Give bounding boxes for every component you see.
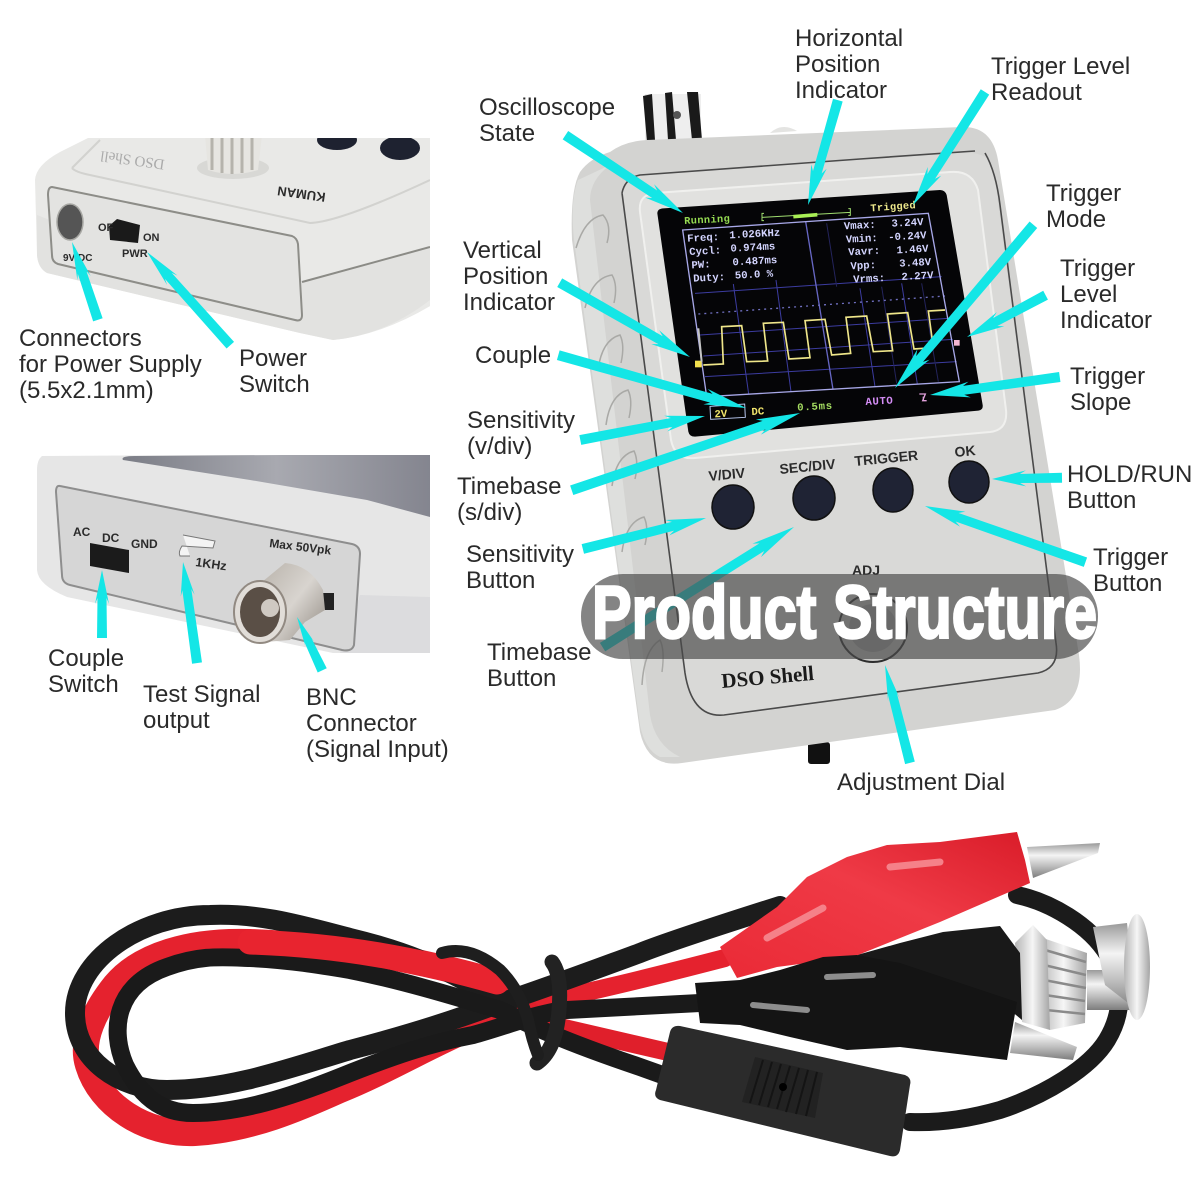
label: Couple Switch: Switch xyxy=(48,671,119,698)
adjustment knob xyxy=(197,135,269,179)
label: Trigger Level Indicator: Trigger xyxy=(1060,255,1135,282)
BNC plug xyxy=(857,914,1150,1030)
label: Sensitivity: (v/div) xyxy=(467,433,532,460)
label: Trigger Mode: Trigger xyxy=(1046,180,1121,207)
status bar: AUTO xyxy=(865,396,894,409)
measurements left: Cycl: xyxy=(689,245,721,259)
measurements left xyxy=(687,228,781,286)
arrow: couple switch xyxy=(95,570,109,638)
arrow: trigger level readout xyxy=(906,88,992,209)
state readouts xyxy=(684,200,916,228)
power jack xyxy=(57,204,83,240)
measurements right: 3.48V xyxy=(899,257,932,271)
rear BNC connector xyxy=(643,92,797,144)
label: Oscilloscope State: Oscilloscope xyxy=(479,94,615,121)
arrow: sensitivity button xyxy=(581,510,708,557)
label: Trigger Button: Button xyxy=(1093,570,1162,597)
black alligator clip xyxy=(695,955,1077,1060)
panel labels: 1KHz xyxy=(195,555,227,573)
arrow: sensitivity xyxy=(579,408,707,448)
button captions: SEC/DIV xyxy=(779,456,837,477)
side clips xyxy=(576,215,663,685)
black wire lower xyxy=(118,957,700,1113)
shell seam xyxy=(302,247,430,282)
right black wire loop xyxy=(910,895,1120,1122)
arrow: oscilloscope state xyxy=(561,129,687,220)
label: Trigger Slope: Slope xyxy=(1070,389,1131,416)
body xyxy=(37,454,430,653)
LCD screen xyxy=(657,190,983,437)
left side strip highlight xyxy=(573,165,680,757)
measurements right: Vavr: xyxy=(848,246,880,259)
label: Power Switch: Power xyxy=(239,345,307,372)
measurements right: Vmin: xyxy=(846,233,878,247)
connector stub under device xyxy=(808,742,830,764)
label: BNC Connector: Connector xyxy=(306,710,417,737)
measurements right: 1.46V xyxy=(896,244,929,257)
measurements left: PW: xyxy=(691,259,711,272)
measurements left: 1.026KHz xyxy=(729,228,781,242)
status bar: 2V xyxy=(714,409,728,421)
label: Oscilloscope State: State xyxy=(479,120,535,147)
button captions: OK xyxy=(954,442,976,460)
outer shell xyxy=(572,127,1080,764)
front panel xyxy=(56,486,360,650)
arrow: vertical position xyxy=(556,276,694,364)
measurements right xyxy=(844,217,934,287)
square wave xyxy=(703,310,945,365)
red wire to box xyxy=(497,982,668,1052)
measurements left: Duty: xyxy=(693,272,725,286)
label: Couple: Couple xyxy=(475,342,551,369)
red alligator clip xyxy=(720,832,1100,978)
button captions: V/DIV xyxy=(708,464,746,484)
status bar: 0.5ms xyxy=(797,401,832,415)
label: Connectors for Power Supply: (5.5x2.1mm) xyxy=(19,377,154,404)
label: Connectors for Power Supply: Connectors xyxy=(19,325,142,352)
panel labels: Max 50Vpk xyxy=(269,536,332,558)
arrow: trigger mode xyxy=(889,220,1040,393)
power switch labels: OF xyxy=(98,222,114,234)
status bar: DC xyxy=(751,406,765,419)
label: Adjustment Dial: Adjustment Dial xyxy=(837,769,1005,796)
plot border xyxy=(683,213,959,397)
label: Timebase: Timebase xyxy=(457,473,561,500)
top face outline xyxy=(72,140,430,223)
cable ties xyxy=(442,951,560,1063)
grid xyxy=(695,223,957,394)
arrow: timebase xyxy=(569,405,803,498)
arrow: trigger level indicator xyxy=(963,288,1049,344)
black molded probe box xyxy=(655,1026,910,1156)
panel labels: AC xyxy=(73,525,91,539)
button captions: ADJ xyxy=(852,562,880,578)
power switch labels: PWR xyxy=(122,248,148,260)
panel labels: DC xyxy=(102,531,120,545)
faceplate line xyxy=(622,151,1057,715)
label: HOLD/RUN Button: HOLD/RUN xyxy=(1067,461,1192,488)
power switch labels xyxy=(63,224,159,261)
centre vertical axis xyxy=(806,222,833,389)
label: BNC Connector: BNC xyxy=(306,684,357,711)
label: Vertical Position Indicator: Position xyxy=(463,263,548,290)
arrow: hold/run button xyxy=(992,470,1062,487)
bezel highlight xyxy=(640,172,1006,458)
button captions xyxy=(708,442,976,578)
label: Sensitivity Button: Sensitivity xyxy=(466,541,574,568)
panel labels xyxy=(73,528,332,570)
arrow: couple xyxy=(556,348,748,416)
label: Horizontal Position Indicator: Indicator xyxy=(795,77,887,104)
power switch labels: 9V DC xyxy=(63,253,92,264)
label: Sensitivity Button: Button xyxy=(466,567,535,594)
label: Timebase: (s/div) xyxy=(457,499,522,526)
trigger level markers xyxy=(695,361,702,367)
arrow: test signal xyxy=(176,561,204,664)
DSO Shell upside-down logo: DSO Shell xyxy=(99,147,166,172)
label: HOLD/RUN Button: Button xyxy=(1067,487,1136,514)
black buttons xyxy=(317,138,420,160)
panel: signal side photo xyxy=(37,454,430,653)
device body top view xyxy=(35,132,440,340)
power switch labels: ON xyxy=(143,232,160,244)
arrow: power switch xyxy=(142,247,236,350)
measurements right: 2.27V xyxy=(901,270,934,284)
inner faceplate xyxy=(622,153,1056,716)
measurements left: 0.974ms xyxy=(730,241,776,256)
panel labels: GND xyxy=(131,537,158,551)
label: Trigger Level Indicator: Indicator xyxy=(1060,307,1152,334)
adjustment dial xyxy=(839,594,907,662)
measurements right: -0.24V xyxy=(888,230,927,244)
buttons xyxy=(712,461,989,529)
label: Test Signal output: Test Signal xyxy=(143,681,260,708)
label: Test Signal output: output xyxy=(143,707,210,734)
label: Timebase Button: Timebase xyxy=(487,639,591,666)
measurements right: Vmax: xyxy=(844,220,876,233)
lower shell xyxy=(37,256,354,340)
red wire top overlay xyxy=(250,942,497,982)
arrow: timebase button xyxy=(598,520,798,654)
measurements right: 3.24V xyxy=(891,217,924,231)
label: Power Switch: Switch xyxy=(239,371,310,398)
arrow: BNC connector xyxy=(292,615,327,672)
arrow: power connector xyxy=(65,240,105,322)
test signal tab xyxy=(179,535,215,556)
front connector panel xyxy=(48,187,302,320)
BNC connector xyxy=(234,563,334,643)
centre dotted axis xyxy=(698,296,945,314)
measurements left: 50.0 % xyxy=(735,269,774,283)
measurements right: Vrms: xyxy=(853,273,885,287)
black wire upper xyxy=(75,906,780,1090)
label: BNC Connector: (Signal Input) xyxy=(306,736,449,763)
label: Trigger Slope: Trigger xyxy=(1070,363,1145,390)
kuman upside-down logo: KUMAN xyxy=(276,183,326,205)
label: Trigger Level Readout: Trigger Level xyxy=(991,53,1130,80)
arrow: trigger button xyxy=(922,498,1088,570)
display glass xyxy=(122,454,430,517)
panel: power side photo xyxy=(35,130,440,340)
label: Sensitivity: Sensitivity xyxy=(467,407,575,434)
label: Horizontal Position Indicator: Horizontal xyxy=(795,25,903,52)
measurements left: Freq: xyxy=(687,232,719,246)
status bar xyxy=(710,394,927,421)
label: Connectors for Power Supply: for Power Supply xyxy=(19,351,202,378)
state readouts: Running xyxy=(684,214,730,228)
label: Vertical Position Indicator: Vertical xyxy=(463,237,542,264)
arrow: adjustment dial xyxy=(879,664,916,764)
panel: probe cable photo xyxy=(75,832,1150,1156)
left vertical trace xyxy=(698,328,702,362)
label: Trigger Button: Trigger xyxy=(1093,544,1168,571)
arrow: horizontal position xyxy=(800,98,846,207)
red wire to clip xyxy=(540,958,725,1002)
red wire lower loop xyxy=(86,942,560,1133)
label: Trigger Level Readout: Readout xyxy=(991,79,1082,106)
arrow: trigger slope xyxy=(929,369,1061,403)
label: Couple Switch: Couple xyxy=(48,645,124,672)
label: Vertical Position Indicator: Indicator xyxy=(463,289,555,316)
panel: oscilloscope body xyxy=(572,127,1080,764)
power slider switch xyxy=(109,219,140,243)
label: Timebase Button: Button xyxy=(487,665,556,692)
measurements left: 0.487ms xyxy=(732,255,778,269)
horizontal position bracket xyxy=(762,209,850,221)
screen background xyxy=(657,190,983,437)
lower shell xyxy=(340,595,430,653)
state readouts: Trigged xyxy=(870,200,916,215)
label: Horizontal Position Indicator: Position xyxy=(795,51,880,78)
label: Trigger Level Indicator: Level xyxy=(1060,281,1117,308)
DSO Shell logo: DSO Shell xyxy=(720,661,815,693)
label: Trigger Mode: Mode xyxy=(1046,206,1106,233)
couple slider xyxy=(90,543,129,573)
button captions: TRIGGER xyxy=(854,447,919,469)
measurements right: Vpp: xyxy=(850,260,876,273)
